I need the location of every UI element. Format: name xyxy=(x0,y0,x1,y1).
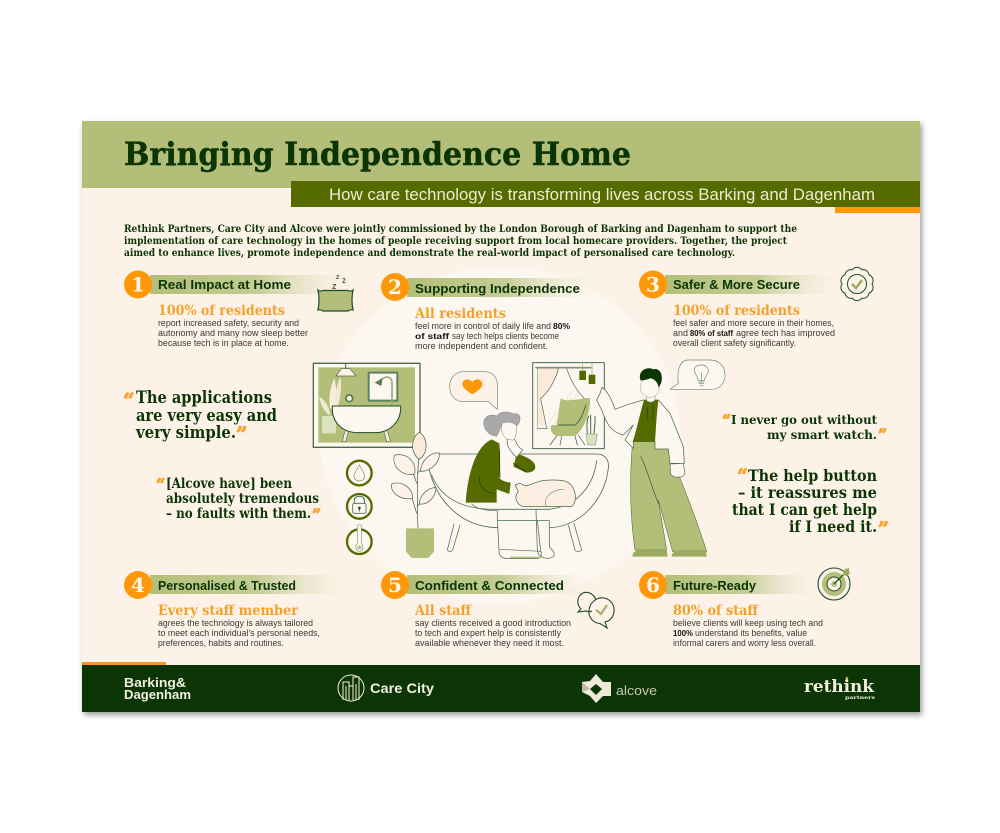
panel: section 4: Personalised & Trusted xyxy=(158,578,296,593)
illustration: plant xyxy=(392,432,439,558)
quote: help button: ” xyxy=(878,518,889,540)
quote: help button: – it reassures me xyxy=(738,483,877,502)
panel: section 3: and xyxy=(673,328,688,338)
illustration: window picture xyxy=(533,363,604,449)
panel: section 6: informal carers and worry less overall. xyxy=(673,638,816,648)
icon: target with arrow xyxy=(818,568,850,600)
quote: help button: “ xyxy=(737,465,748,487)
quote: smart watch: ” xyxy=(878,425,887,444)
logo: rethink partners: rethink xyxy=(804,677,875,697)
quote: applications: The applications xyxy=(136,388,272,407)
panel: section 4: to meet each individual's personal needs, xyxy=(158,628,320,638)
panel: section 6: Future-Ready xyxy=(673,578,757,593)
logo: alcove: alcove xyxy=(616,683,657,698)
panel: section 5: say clients received a good introduction xyxy=(415,618,571,628)
panel: section 1: 100% of residents xyxy=(158,303,285,319)
subtitle band: How care technology is transforming lives across Barking and Dagenham xyxy=(329,185,875,204)
panel: section 1 xyxy=(124,270,365,348)
panel: section 2: 2 xyxy=(388,275,402,299)
logo: Barking and Dagenham: Barking& xyxy=(124,675,186,690)
panel: section 2: more independent and confident. xyxy=(415,341,548,351)
quote: smart watch: I never go out without xyxy=(731,412,877,427)
logo: Care City xyxy=(338,675,434,701)
quote: smart watch: “ xyxy=(722,411,731,430)
illustration: central room scene xyxy=(313,360,725,558)
panel: section 2: Supporting Independence xyxy=(415,281,580,296)
panel: section 4: agrees the technology is always tailored xyxy=(158,618,313,628)
icon: pillow with zzz xyxy=(318,274,353,311)
panel: section 2 xyxy=(381,273,607,351)
panel: section 2: All residents xyxy=(414,306,506,322)
logo: Care City: Care City xyxy=(370,680,434,696)
central pale blob xyxy=(320,267,680,603)
panel: section 3: 100% of residents xyxy=(673,303,800,319)
header band xyxy=(82,121,920,188)
panel: section 3: Safer & More Secure xyxy=(673,277,800,292)
panel: section 5: 5 xyxy=(388,573,402,597)
logo: rethink partners: partners xyxy=(845,695,875,701)
quote: Alcove: [Alcove have] been xyxy=(166,476,292,492)
intro text: Rethink Partners, Care City and Alcove were jointly commissioned by the London Borough of Barking and Dagenham to support the xyxy=(124,224,797,235)
logo: Barking and Dagenham xyxy=(124,675,191,702)
quote: applications: are very easy and xyxy=(136,406,277,425)
quote: Alcove: “ xyxy=(156,475,165,494)
panel: section 5: available whenever they need it most. xyxy=(415,638,564,648)
icon: gear with check xyxy=(841,267,873,301)
icon: pillow with zzz: z xyxy=(342,276,346,285)
icon: thermometer xyxy=(347,525,372,554)
quote: smart watch xyxy=(722,411,887,444)
panel: section 4: Every staff member xyxy=(158,603,299,619)
icon: chat bubbles with check xyxy=(578,592,614,628)
panel: section 4: preferences, habits and routines. xyxy=(158,638,284,648)
panel: section 6: 6 xyxy=(646,573,660,597)
illustration: lightbulb speech bubble xyxy=(670,360,725,389)
panel: section 1: autonomy and many now sleep better xyxy=(158,328,308,338)
quote: help button xyxy=(732,465,889,540)
panel: section 3 xyxy=(639,270,850,348)
illustration: heart speech bubble xyxy=(450,372,497,409)
quote: applications: very simple. xyxy=(135,423,236,442)
illustration: older woman with cat xyxy=(466,412,575,558)
icon: padlock xyxy=(347,494,372,519)
quote: Alcove: – no faults with them. xyxy=(166,506,311,522)
panel: section 4 xyxy=(124,571,365,648)
quote: applications xyxy=(123,388,277,446)
panel: section 5: to tech and expert help is consistently xyxy=(415,628,561,638)
panel: section 6 xyxy=(639,571,825,648)
subtitle band xyxy=(291,181,920,213)
illustration: standing man xyxy=(597,368,707,557)
intro text: aimed to enhance lives, promote independence and demonstrate the real-world impact of personalised care technology. xyxy=(124,248,735,259)
footer band xyxy=(82,662,920,712)
panel: section 5: All staff xyxy=(414,603,472,619)
icon: pillow with zzz: z xyxy=(336,274,340,281)
quote: Alcove: ” xyxy=(312,505,321,524)
panel: section 3: 80% of staff xyxy=(690,328,733,338)
panel: section 3: 3 xyxy=(646,272,660,296)
panel: section 6: understand its benefits, value xyxy=(695,628,807,638)
panel: section 2: 80% xyxy=(553,321,570,331)
illustration: bathroom picture xyxy=(313,363,420,447)
panel: section 6: 100% xyxy=(673,628,693,638)
title: Bringing Independence Home xyxy=(124,135,631,173)
quote: help button: that I can get help xyxy=(732,500,877,519)
quote: Alcove xyxy=(156,475,321,524)
panel: section 1: report increased safety, security and xyxy=(158,318,299,328)
panel: section 1: 1 xyxy=(131,272,145,296)
quote: smart watch: my smart watch. xyxy=(767,427,877,442)
panel: section 5 xyxy=(381,571,602,648)
panel: section 2: say tech helps clients become xyxy=(452,331,559,341)
panel: section 2: of staff xyxy=(415,331,449,341)
icon: pillow with zzz: z xyxy=(332,281,337,291)
panel: poster background xyxy=(82,121,920,712)
panel: section 4: 4 xyxy=(131,573,145,597)
icon: water drop xyxy=(347,461,372,485)
intro text xyxy=(124,224,797,259)
quote: applications: “ xyxy=(123,388,135,412)
panel: section 3: feel safer and more secure in their homes, xyxy=(673,318,834,328)
logo: Barking and Dagenham: Dagenham xyxy=(124,687,191,702)
panel: section 3: agree tech has improved xyxy=(736,328,835,338)
panel: section 2: feel more in control of daily life and xyxy=(415,321,551,331)
intro text: implementation of care technology in the homes of people receiving support from local homecare providers. Together, the project xyxy=(124,236,787,247)
quote: help button: if I need it. xyxy=(789,517,877,536)
icons: care sensors xyxy=(347,461,372,554)
panel: section 6: believe clients will keep using tech and xyxy=(673,618,823,628)
logo: alcove xyxy=(582,674,657,703)
panel: section 1: because tech is in place at home. xyxy=(158,338,289,348)
panel: section 3: overall client safety significantly. xyxy=(673,338,796,348)
panel: section 5: Confident & Connected xyxy=(415,578,564,593)
illustration: sofa xyxy=(429,454,608,552)
quote: applications: ” xyxy=(236,422,248,446)
panel: section 1: Real Impact at Home xyxy=(158,277,291,292)
quote: Alcove: absolutely tremendous xyxy=(166,491,319,507)
panel: section 6: 80% of staff xyxy=(673,603,759,619)
quote: help button: The help button xyxy=(748,466,877,485)
